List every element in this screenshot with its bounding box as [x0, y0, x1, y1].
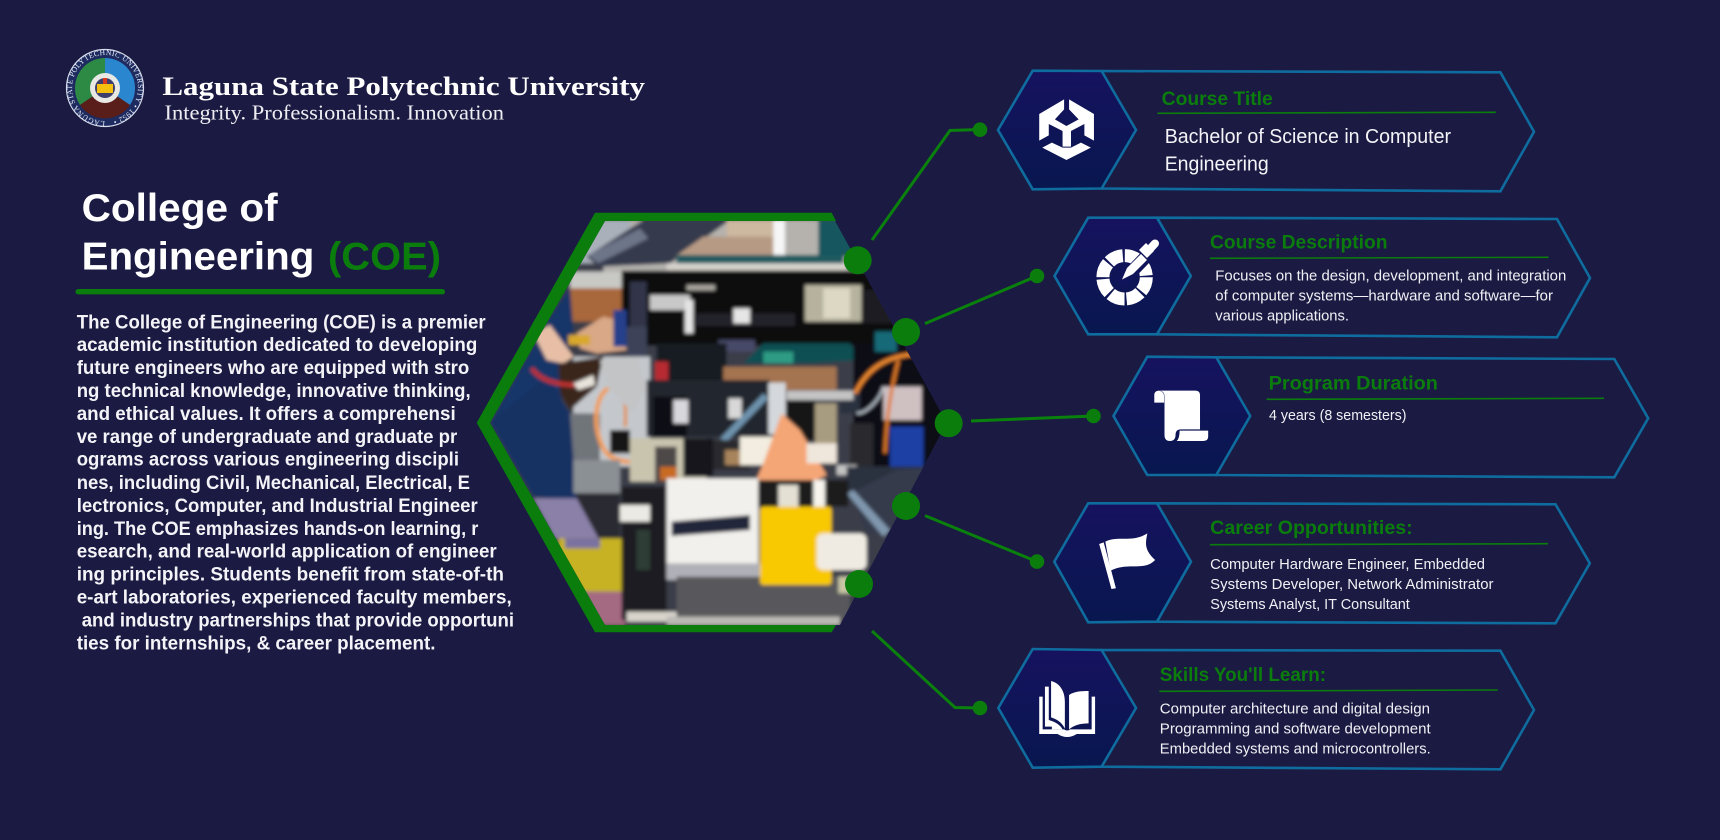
intro paragraph	[77, 312, 514, 655]
logo: university seal: LAGUNA STATE POLYTECHNIC UNIVERSITY • 1952 •	[67, 50, 143, 126]
photo connector dots	[844, 246, 963, 598]
icon: unity cube	[1039, 99, 1094, 160]
heading: skills you'll learn: Skills You'll Learn:	[1160, 665, 1326, 686]
icon: flag	[1099, 533, 1155, 589]
text: course title value: Bachelor of Science in Computer	[1165, 126, 1451, 148]
text: skills body: Embedded systems and microcontrollers.	[1160, 741, 1431, 757]
intro paragraph: ograms across various engineering discipli	[77, 450, 459, 471]
title: Engineering	[82, 235, 314, 278]
intro paragraph: future engineers who are equipped with stro	[77, 358, 469, 379]
intro paragraph: nes, including Civil, Mechanical, Electrical, E	[77, 473, 470, 494]
title underline	[76, 289, 445, 294]
text: course title value: Engineering	[1165, 154, 1269, 176]
hexagon photo frame	[477, 213, 836, 632]
icon: open book	[1039, 681, 1095, 737]
title	[82, 187, 441, 278]
text: course title value	[1165, 126, 1451, 176]
panel: career opportunities	[1054, 503, 1590, 623]
text: program duration value: 4 years (8 semesters)	[1269, 408, 1406, 424]
heading: course title: Course Title	[1162, 89, 1273, 110]
text: course description body	[1215, 269, 1566, 325]
text: career opportunities body: Systems Developer, Network Administrator	[1210, 577, 1494, 593]
intro paragraph: and ethical values. It offers a comprehensi	[77, 404, 456, 425]
intro paragraph: ve range of undergraduate and graduate pr	[77, 427, 458, 448]
university tagline: Integrity. Professionalism. Innovation	[164, 100, 505, 124]
panel: course title	[998, 71, 1534, 191]
university name: Laguna State Polytechnic University	[162, 72, 645, 101]
intro paragraph: ing principles. Students benefit from state-of-th	[77, 565, 504, 586]
panel: program duration	[1114, 357, 1648, 477]
text: career opportunities body	[1210, 557, 1494, 613]
text: skills body	[1160, 701, 1431, 757]
text: career opportunities body: Computer Hardware Engineer, Embedded	[1210, 557, 1485, 573]
intro paragraph: esearch, and real-world application of engineer	[77, 542, 497, 563]
heading: course description: Course Description	[1210, 232, 1388, 253]
text: course description body: various applications.	[1215, 309, 1349, 325]
heading: career opportunities: Career Opportunities:	[1210, 518, 1413, 539]
intro paragraph: e-art laboratories, experienced faculty members,	[77, 588, 512, 609]
intro paragraph: The College of Engineering (COE) is a premier	[77, 312, 486, 333]
intro paragraph: academic institution dedicated to developing	[77, 335, 477, 356]
text: skills body: Computer architecture and digital design	[1160, 701, 1430, 717]
intro paragraph: ties for internships, & career placement.	[77, 634, 435, 655]
text: career opportunities body: Systems Analyst, IT Consultant	[1210, 597, 1410, 613]
central photo: engineering robot	[490, 221, 941, 625]
icon: scroll	[1154, 391, 1208, 441]
panel: skills you'll learn	[998, 649, 1534, 769]
intro paragraph: and industry partnerships that provide opportuni	[82, 611, 514, 632]
title: (COE)	[328, 235, 441, 278]
text: skills body: Programming and software development	[1160, 721, 1431, 737]
connector lines	[872, 122, 1101, 715]
intro paragraph: lectronics, Computer, and Industrial Engineer	[77, 496, 478, 517]
heading: program duration: Program Duration	[1269, 373, 1438, 394]
text: course description body: of computer systems—hardware and software—for	[1215, 289, 1553, 305]
title: College of	[82, 187, 278, 230]
text: course description body: Focuses on the design, development, and integration	[1215, 269, 1566, 285]
icon: palette and pen	[1103, 243, 1158, 299]
intro paragraph: ing. The COE emphasizes hands-on learning, r	[77, 519, 479, 540]
intro paragraph: ng technical knowledge, innovative thinking,	[77, 381, 471, 402]
panel: course description	[1054, 218, 1590, 337]
